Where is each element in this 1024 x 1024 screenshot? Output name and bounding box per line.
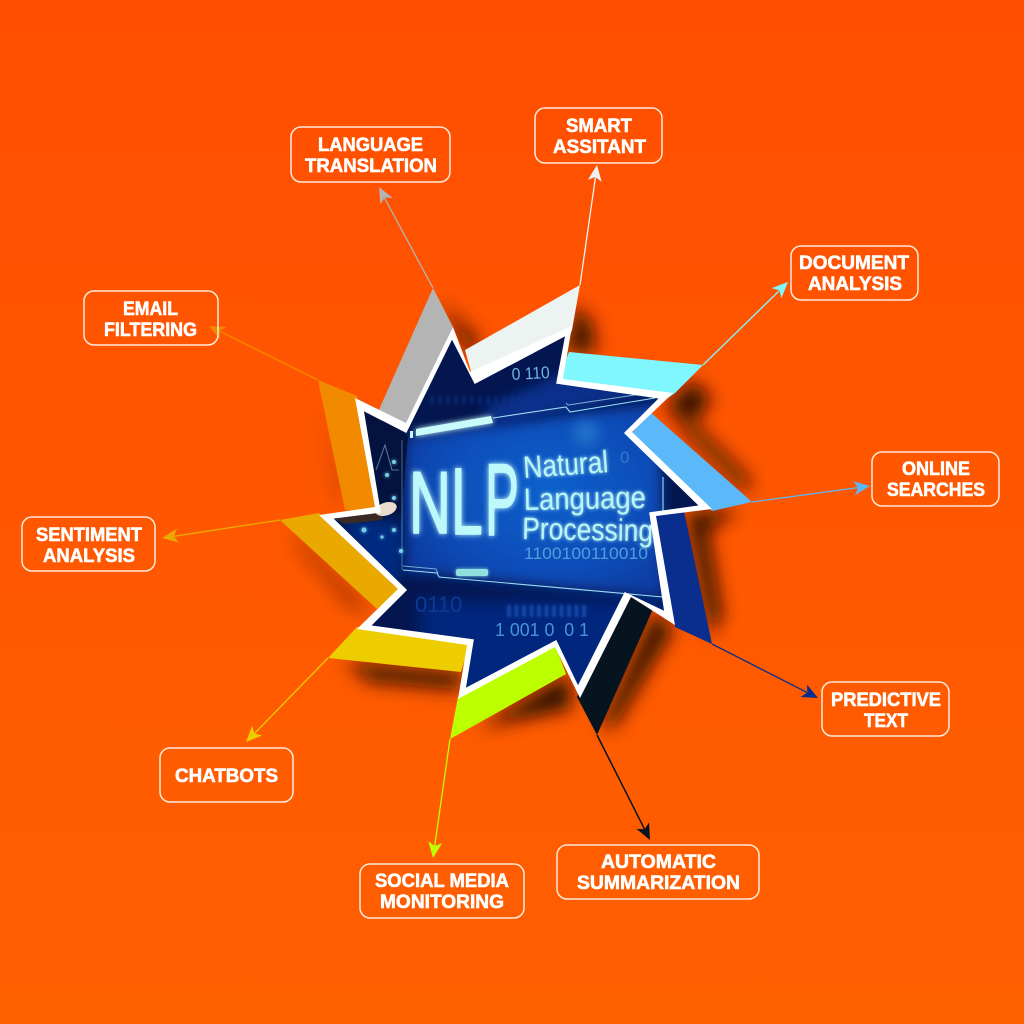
flap: off-white [465,285,580,386]
flap: black [577,592,653,735]
Natural Language Processing text [522,444,653,548]
arrow: chatbots [241,658,328,747]
Natural Language Processing text: Processing [522,511,653,548]
binary digits: 0 [620,448,629,467]
flap: lime [450,645,566,739]
label: online searches [872,452,999,506]
arrow: automatic summarization [597,735,656,843]
label: online searches: ONLINE [902,458,970,480]
label: chatbots [160,748,293,802]
binary digits [415,363,648,640]
faint binary rows [430,395,513,405]
label: automatic summarization: AUTOMATIC [601,851,716,873]
flap: yellow [328,627,470,672]
binary digits: 1 001 0 0 1 [495,620,589,640]
arrow: smart assistant [580,164,604,285]
pale dash and blue bars [456,569,488,576]
arrow: online searches [752,479,871,502]
label: document analysis: DOCUMENT [799,252,909,274]
label: social media monitoring [360,864,524,918]
circuit lines [376,392,663,597]
flap: dark blue [652,511,712,644]
dotted column [400,443,404,520]
binary digits: 0 110 [511,363,550,384]
label: predictive text: TEXT [864,710,908,732]
label: language translation: LANGUAGE [318,134,423,156]
label: smart assistant: ASSITANT [553,136,646,158]
Natural Language Processing text: Language [524,480,646,517]
label: social media monitoring: MONITORING [380,891,504,913]
fingertip [334,502,397,524]
label: smart assistant [535,108,662,163]
label: language translation [291,127,450,182]
NLP heading: P [485,444,519,558]
label: social media monitoring: SOCIAL MEDIA [375,870,509,892]
central star image [333,336,698,688]
label: document analysis [791,246,918,300]
arrow: email filtering [206,320,318,380]
flap: orange [318,380,378,510]
label: sentiment analysis: ANALYSIS [43,545,135,567]
NLP heading: N [409,454,451,552]
label: chatbots: CHATBOTS [175,765,278,787]
Natural Language Processing text: Natural [522,444,609,485]
label: email filtering: EMAIL [123,298,178,320]
label: predictive text: PREDICTIVE [831,689,941,711]
NLP heading: L [451,448,483,555]
glowing bar [416,416,493,436]
white star border [319,326,712,699]
arrow: language translation [373,184,433,288]
binary digits: 1100100110010 [524,544,648,563]
flap: cyan [555,352,703,400]
arrow: document analysis [703,277,793,365]
flap: light blue [630,411,752,511]
binary digits: 0110 [415,592,462,617]
label: sentiment analysis: SENTIMENT [36,524,142,546]
label: email filtering: FILTERING [104,319,197,341]
image background [333,336,698,688]
label: email filtering [84,291,218,345]
circuit nodes [356,460,403,557]
label: online searches: SEARCHES [887,479,985,501]
flap shadows [292,302,752,728]
inner white edge [332,335,700,689]
label: smart assistant: SMART [566,115,632,137]
flap: amber [280,513,400,609]
NLP heading [408,459,521,540]
label: automatic summarization [557,845,759,899]
flap: grey [378,288,453,428]
arrow: sentiment analysis [161,520,280,545]
label: language translation: TRANSLATION [305,155,437,177]
label: predictive text [822,682,949,736]
label: sentiment analysis [22,517,155,571]
arrow: predictive text [712,644,821,704]
label: document analysis: ANALYSIS [808,273,902,295]
label: automatic summarization: SUMMARIZATION [577,872,740,894]
arrow: social media monitoring [426,739,450,859]
